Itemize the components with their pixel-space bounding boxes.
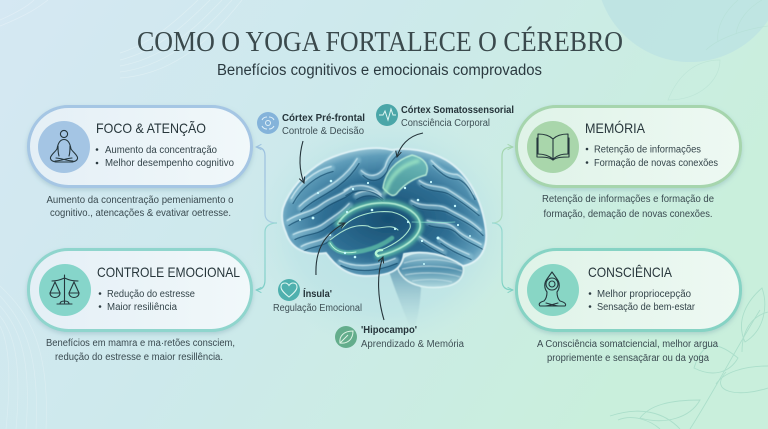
list: consciência: Sensação de bem-estar bbox=[597, 302, 696, 313]
callout: córtex somatossensorial bbox=[376, 104, 514, 129]
icon: open book bbox=[527, 121, 579, 173]
callout: hipocampo: Aprendizado & Memória bbox=[361, 339, 464, 350]
icon: heart bbox=[278, 279, 300, 301]
icon: leaf bbox=[335, 326, 357, 348]
subtitle: Benefícios cognitivos e emocionais comprovados bbox=[217, 62, 542, 79]
heading: memória: MEMÓRIA bbox=[585, 120, 646, 136]
callout: córtex pré-frontal: Controle & Decisão bbox=[282, 126, 364, 137]
text: consciência description: propriemente e sensaçārar ou da yoga bbox=[547, 353, 709, 364]
heading: foco e atenção: FOCO & ATENÇÃO bbox=[96, 120, 206, 136]
callout: ínsula bbox=[273, 279, 362, 314]
panel: consciência bbox=[516, 250, 740, 330]
callout: córtex somatossensorial: Córtex Somatossensorial bbox=[401, 105, 514, 116]
text: memória description bbox=[542, 194, 714, 220]
panel: foco e atenção bbox=[28, 106, 252, 186]
illustration: brain bbox=[264, 141, 502, 324]
text: consciência description bbox=[537, 339, 718, 364]
connector: left bracket bbox=[256, 147, 277, 290]
arrow: hipocampo bbox=[379, 257, 384, 320]
callout: córtex pré-frontal bbox=[257, 112, 365, 137]
heading: consciência: CONSCIÊNCIA bbox=[588, 264, 673, 280]
list: foco e atenção bbox=[96, 145, 234, 169]
brain stem bbox=[388, 268, 421, 332]
list: memória: Retenção de informações bbox=[594, 144, 701, 156]
icon: scales bbox=[39, 264, 91, 316]
list: controle emocional: Redução do estresse bbox=[107, 289, 195, 300]
text: memória description: Retenção de informações e formação de bbox=[542, 194, 714, 205]
callout: hipocampo bbox=[335, 325, 464, 350]
cerebrum rim light bbox=[282, 148, 486, 276]
title: COMO O YOGA FORTALECE O CÉREBRO bbox=[137, 27, 623, 58]
neural sparks bbox=[299, 180, 471, 265]
callout: hipocampo: 'Hipocampo' bbox=[361, 325, 417, 336]
cerebellum bbox=[397, 251, 463, 288]
heading: controle emocional: CONTROLE EMOCIONAL bbox=[97, 264, 240, 280]
arrow: córtex pré-frontal bbox=[300, 141, 304, 183]
icon: focus target bbox=[257, 112, 279, 134]
arrow: córtex somatossensorial bbox=[397, 133, 423, 157]
callout: ínsula: Regulação Emocional bbox=[273, 303, 362, 314]
list: controle emocional bbox=[99, 289, 195, 313]
list: consciência: Melhor propriocepção bbox=[597, 289, 691, 300]
list: consciência bbox=[589, 289, 696, 313]
text: consciência description: A Consciência somatciencial, melhor argua bbox=[537, 339, 718, 350]
panel: memória bbox=[516, 106, 740, 186]
text: foco description bbox=[46, 195, 234, 219]
icon: pulse bbox=[376, 104, 398, 126]
limbic region bbox=[330, 203, 455, 256]
list: memória bbox=[586, 144, 718, 169]
text: controle description bbox=[46, 338, 235, 363]
text: foco description: Aumento da concentração pemeniamento o bbox=[46, 195, 234, 206]
connector: right bracket bbox=[492, 147, 513, 290]
text: controle description: redução do estresse e maior resillência. bbox=[55, 352, 223, 363]
decoration: leaves top right bbox=[668, 0, 768, 100]
list: memória: Formação de novas conexões bbox=[594, 158, 718, 169]
callout: córtex pré-frontal: Córtex Pré-frontal bbox=[282, 113, 365, 124]
arrow: ínsula bbox=[316, 223, 345, 275]
decoration: top right circle bbox=[596, 0, 768, 62]
icon: yoga pose bbox=[527, 264, 579, 316]
text: foco description: cognitivo., atencações & evativar oetresse. bbox=[50, 208, 231, 219]
text: controle description: Benefícios em mamra e ma·retões consciem, bbox=[46, 338, 235, 349]
list: foco e atenção: Aumento da concentração bbox=[105, 145, 217, 156]
gyri folds bbox=[287, 150, 483, 270]
callout: ínsula: Ínsula' bbox=[303, 287, 332, 300]
text: memória description: formação, demação de novas conexões. bbox=[544, 209, 712, 220]
list: controle emocional: Maior resiliência bbox=[107, 302, 177, 313]
somatosensory region bbox=[383, 155, 427, 195]
icon: meditating figure bbox=[38, 121, 90, 173]
decoration: bottom left wave lines bbox=[0, 286, 46, 429]
panel: controle emocional bbox=[28, 250, 252, 330]
decoration: leaves bottom right bbox=[610, 288, 768, 429]
decoration: top left wave lines bbox=[0, 0, 242, 78]
list: foco e atenção: Melhor desempenho cognitivo bbox=[105, 158, 234, 169]
cerebrum bbox=[282, 148, 486, 276]
callout: córtex somatossensorial: Consciência Corporal bbox=[401, 118, 490, 129]
